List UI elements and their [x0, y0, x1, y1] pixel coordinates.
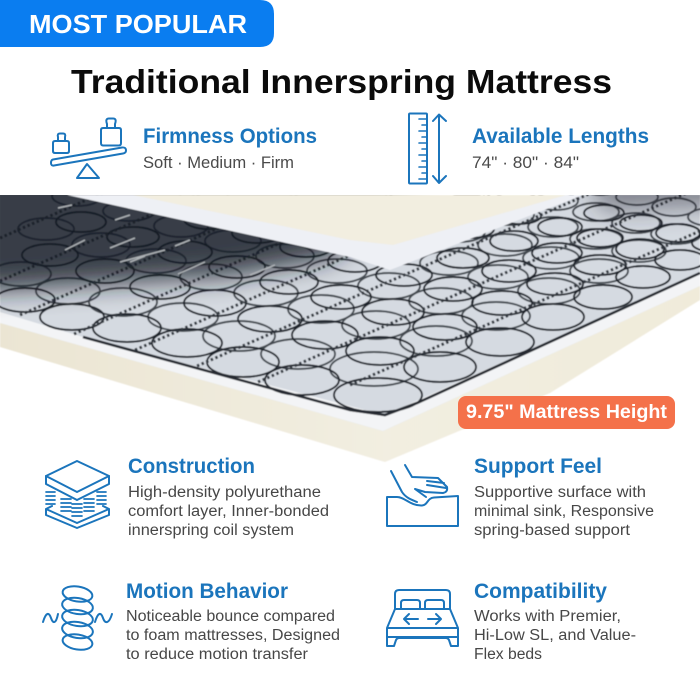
helical lacing wires	[0, 187, 700, 385]
callout: mattress height: 9.75" Mattress Height	[466, 402, 668, 423]
heading: construction: Construction	[128, 455, 255, 478]
panel: motion behavior	[43, 580, 340, 663]
badge: most popular	[0, 0, 274, 47]
batting front edge highlight	[0, 273, 700, 431]
icon: spring with motion waves	[43, 584, 112, 652]
text: motion description: Noticeable bounce compared	[126, 608, 335, 625]
icon: hand pressing foam	[387, 465, 458, 526]
heading: available lengths: Available Lengths	[472, 125, 649, 148]
text: motion description: to foam mattresses, Designed	[126, 627, 340, 644]
upper batting layer	[67, 195, 583, 270]
heading: support feel: Support Feel	[474, 455, 602, 478]
text: support description: minimal sink, Responsive	[474, 503, 654, 520]
text: support description: spring-based support	[474, 522, 631, 539]
text: compatibility description: Flex beds	[474, 646, 542, 663]
title: Traditional Innerspring Mattress	[71, 63, 612, 100]
white batting layer	[0, 195, 700, 431]
icon: balance scale with weights	[51, 118, 126, 178]
text: firmness values: Soft · Medium · Firm	[143, 154, 294, 172]
callout: mattress height	[458, 396, 675, 429]
text: construction description: innerspring coil system	[128, 522, 294, 539]
icon: ruler with double arrow	[409, 114, 446, 184]
badge: most popular: MOST POPULAR	[29, 9, 247, 39]
text: construction description: comfort layer, Inner-bonded	[128, 503, 329, 520]
text: motion description: to reduce motion transfer	[126, 646, 308, 663]
panel: compatibility	[387, 580, 636, 663]
heading: compatibility: Compatibility	[474, 580, 607, 603]
upper cream foam layer	[133, 195, 566, 245]
coil rings	[0, 179, 700, 412]
heading: firmness options: Firmness Options	[143, 125, 317, 148]
dark shaded upper right coils	[580, 195, 700, 228]
text: construction description	[128, 484, 329, 539]
text: compatibility description: Works with Premier,	[474, 608, 621, 625]
mattress cutaway illustration	[0, 195, 700, 462]
text: compatibility description: Hi-Low SL, and Value-	[474, 627, 636, 644]
panel: construction	[46, 455, 329, 539]
icon: layered coil construction	[46, 461, 109, 528]
text: motion description	[126, 608, 340, 663]
foam base layer	[0, 270, 700, 462]
text: support description: Supportive surface with	[474, 484, 646, 501]
icon: bed with arrows	[387, 590, 458, 646]
firmness options	[51, 118, 317, 178]
panel: support feel	[387, 455, 654, 539]
text: construction description: High-density polyurethane	[128, 484, 321, 501]
heading: motion behavior: Motion Behavior	[126, 580, 288, 603]
available lengths	[409, 114, 649, 184]
dark shaded rear coils	[0, 195, 420, 310]
text: support description	[474, 484, 654, 539]
text: length values: 74" · 80" · 84"	[472, 154, 579, 172]
silver wire glints	[58, 205, 275, 275]
front border wire	[83, 273, 700, 415]
text: compatibility description	[474, 608, 636, 663]
